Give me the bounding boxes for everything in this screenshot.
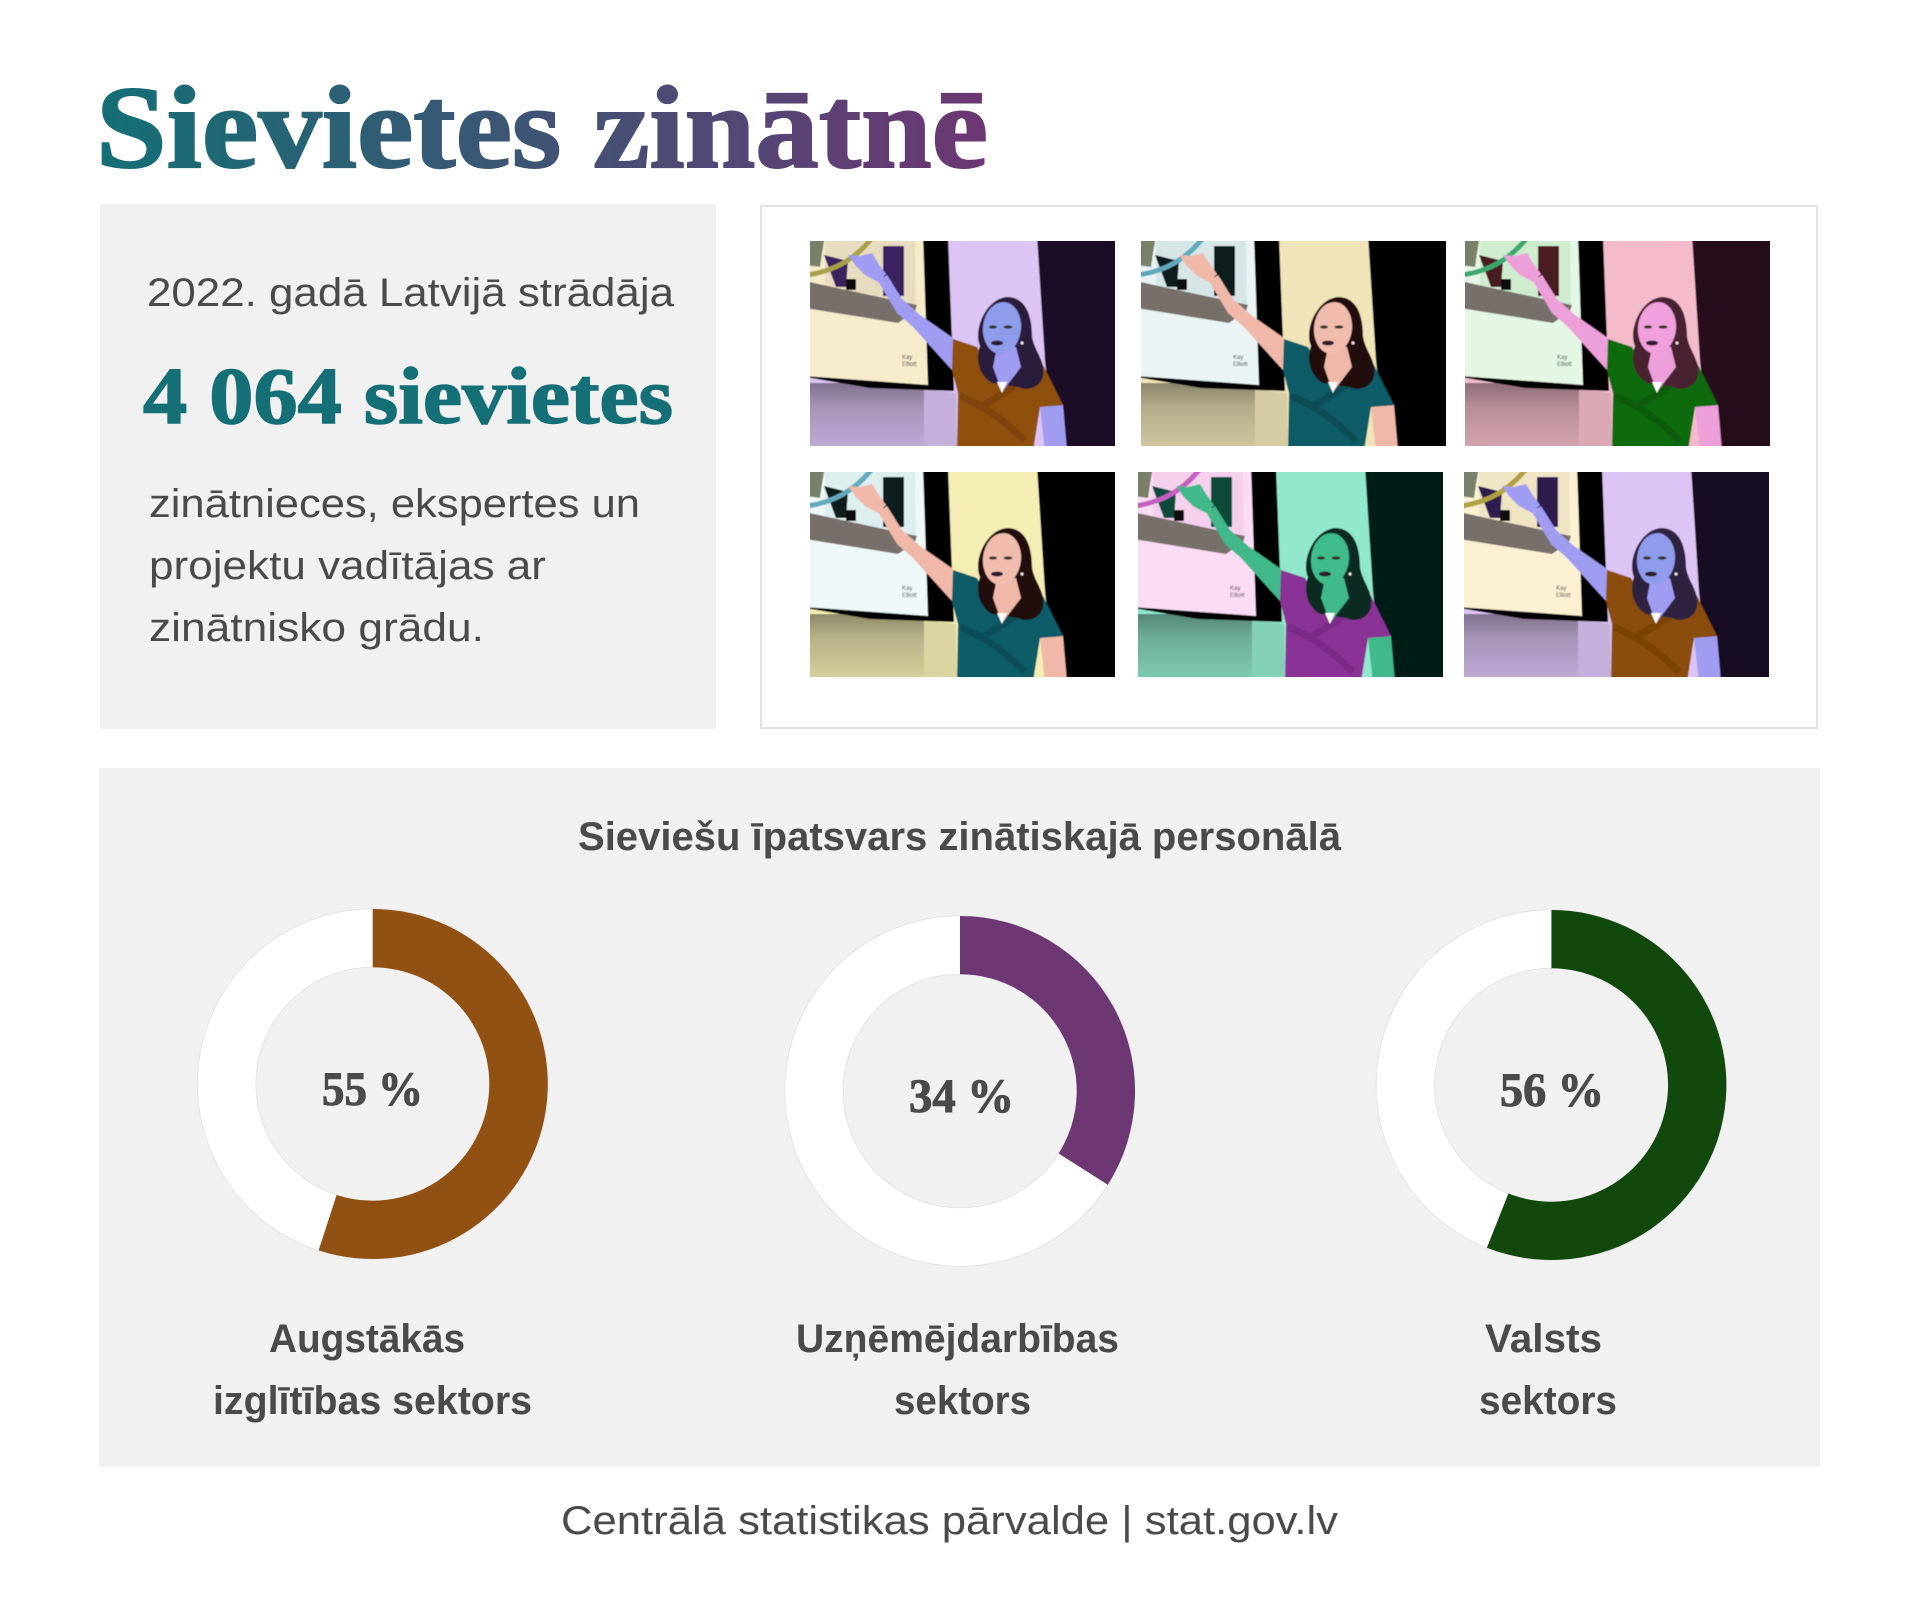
panel: photo grid (761, 206, 1817, 728)
photo: pink wall, green shirt (1460, 236, 1775, 451)
donut: higher education 55%: 55 % (322, 1063, 423, 1116)
donut: business 34% (814, 916, 1135, 1237)
donut: higher education 55% (227, 909, 548, 1259)
chart heading: Sieviešu īpatsvars zinātiskajā personālā (578, 815, 1342, 859)
title: Sievietes zinātnē (96, 62, 988, 193)
donut: business 34%: 34 % (909, 1070, 1014, 1123)
label: business sector (796, 1317, 1119, 1423)
text: description: zinātnisko grādu. (149, 606, 484, 650)
label: business sector: sektors (894, 1379, 1031, 1423)
text: description: zinātnieces, ekspertes un (149, 482, 640, 526)
photo: lilac wall, orange shirt (1459, 467, 1774, 682)
photo: cream wall, teal shirt (805, 467, 1120, 682)
footer source: Centrālā statistikas pārvalde | stat.gov.lv (561, 1499, 1338, 1543)
text: description (149, 482, 640, 650)
text: description: projektu vadītājas ar (149, 544, 546, 588)
donut: government 56%: 56 % (1500, 1064, 1604, 1117)
panel: share of women in scientific staff (99, 768, 1820, 1467)
label: government sector (1479, 1317, 1617, 1423)
label: higher education sector: izglītības sektors (213, 1379, 532, 1423)
label: government sector: Valsts (1485, 1317, 1602, 1361)
big number: 4 064 sievietes (143, 353, 673, 441)
photo: mint wall, purple shirt (1133, 467, 1448, 682)
donut: government 56% (1405, 910, 1726, 1260)
label: higher education sector: Augstākās (269, 1317, 465, 1361)
panel: headline statistic (100, 204, 716, 729)
photo: lilac wall, brown shirt (805, 236, 1120, 451)
label: higher education sector (213, 1317, 532, 1423)
text: intro line: 2022. gadā Latvijā strādāja (147, 271, 675, 315)
photo: yellow wall, teal shirt (1136, 236, 1451, 451)
label: government sector: sektors (1479, 1379, 1617, 1423)
label: business sector: Uzņēmējdarbības (796, 1317, 1119, 1361)
